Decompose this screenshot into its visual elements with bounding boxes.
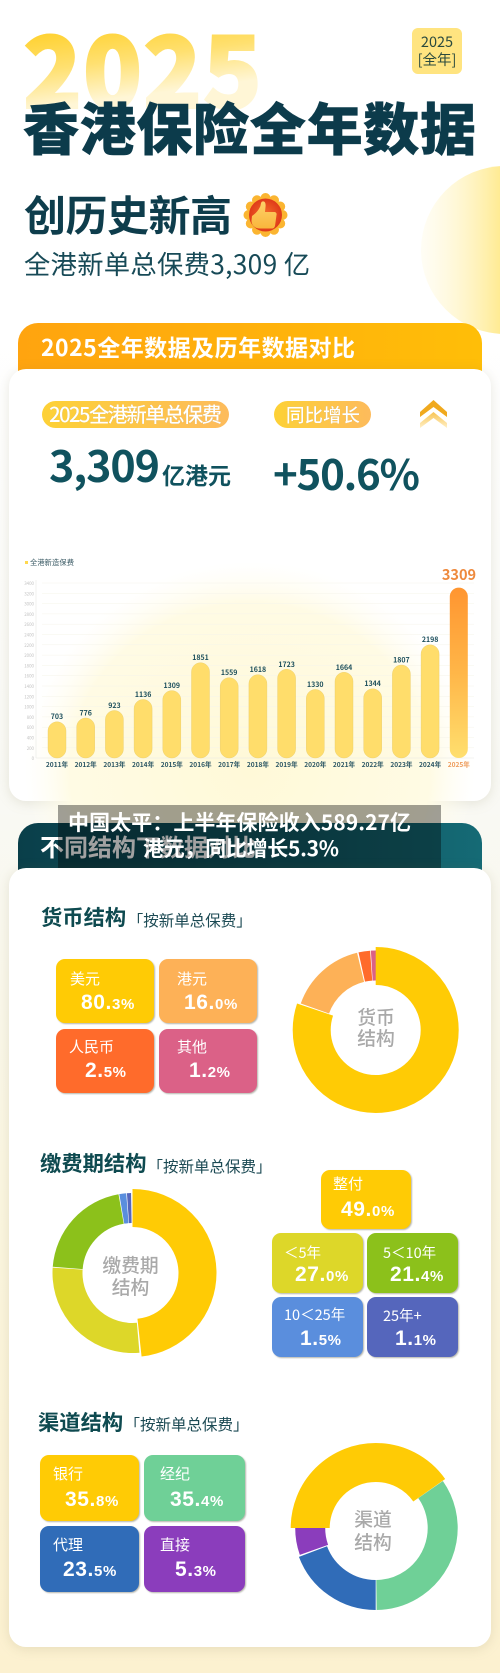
year labels (46, 759, 470, 769)
card: single pay (321, 1170, 411, 1229)
card: 10 to 25 years (272, 1297, 363, 1357)
card: other: 1.2% (189, 1059, 231, 1082)
card: single pay: 49.0% (341, 1198, 395, 1221)
card: under 5 years (272, 1233, 363, 1293)
bar value labels: 3309 (442, 564, 476, 585)
card: direct: 直接 (160, 1534, 190, 1555)
stat: total premium (49, 433, 231, 495)
year labels: 2019年 (276, 759, 298, 769)
heading: currency structure: 「按新单总保费」 (128, 909, 252, 931)
card: USD (56, 959, 154, 1023)
bar value labels: 1344 (364, 679, 381, 689)
y axis: 3400 (24, 581, 35, 587)
chart legend: 全港新造保费 (30, 558, 74, 568)
donut: currency (293, 948, 458, 1112)
panel: structure breakdown (9, 868, 491, 1647)
donut centre label (357, 1003, 395, 1051)
overlay news banner (58, 805, 441, 868)
heading: channel structure: 「按新单总保费」 (124, 1413, 249, 1435)
donut centre label: 货币 (357, 1003, 395, 1030)
card: bank (40, 1455, 139, 1521)
year labels: 2022年 (362, 759, 384, 769)
bar value labels: 776 (80, 708, 92, 718)
card: 5 to 10 years: 21.4% (390, 1263, 444, 1286)
year labels: 2024年 (419, 759, 442, 769)
card: bank: 银行 (53, 1463, 83, 1484)
card: broker (144, 1455, 245, 1521)
card: under 5 years: 27.0% (295, 1263, 349, 1286)
card: RMB: 2.5% (85, 1059, 127, 1082)
y axis: 1000 (24, 705, 35, 711)
y axis: 2600 (24, 622, 35, 628)
year labels: 2016年 (189, 759, 212, 769)
y axis: 2200 (24, 643, 35, 649)
year badge: [全年] (418, 49, 456, 70)
card: agent: 代理 (53, 1534, 83, 1555)
bar value labels: 1309 (164, 681, 180, 691)
donut centre label (102, 1251, 159, 1300)
subtitle: record high: 创历史新高 (24, 183, 232, 244)
bar chart (24, 558, 476, 978)
pill: yoy growth: 同比增长 (286, 402, 360, 428)
stat cards: currency (56, 959, 257, 1093)
y axis: 2400 (24, 632, 35, 638)
bar value labels: 1618 (250, 665, 266, 675)
donut centre label: 结构 (357, 1024, 395, 1051)
card: USD: 美元 (70, 968, 100, 989)
stat: total premium: 3,309 (49, 433, 160, 495)
heading: currency structure: 货币结构 (41, 901, 126, 932)
section header orange: 2025全年数据及历年数据对比 (41, 329, 355, 363)
year labels: 2020年 (304, 759, 327, 769)
y axis: 0 (32, 756, 35, 762)
y axis: 3200 (24, 591, 35, 597)
stat cards: channel (40, 1455, 245, 1592)
y axis: 1600 (24, 674, 35, 680)
card: 10 to 25 years: 10＜25年 (284, 1304, 345, 1325)
donut centre label: 缴费期 (102, 1251, 159, 1278)
donut centre label (354, 1505, 392, 1555)
heading: channel structure (38, 1406, 249, 1437)
card: over 25 years: 1.1% (395, 1327, 437, 1350)
bar value labels: 1136 (135, 690, 151, 700)
y axis: 1800 (24, 663, 35, 669)
y axis: 200 (27, 746, 35, 752)
y axis: 2000 (24, 653, 35, 659)
bar value labels: 1723 (278, 660, 295, 670)
y axis: 3000 (24, 602, 35, 608)
card: broker: 经纪 (160, 1463, 190, 1484)
bar value labels: 1559 (221, 668, 237, 678)
y axis: 2800 (24, 612, 35, 618)
bar value labels: 923 (108, 701, 121, 711)
card: direct: 5.3% (175, 1558, 217, 1581)
white card (9, 369, 491, 801)
card: HKD: 16.0% (184, 991, 238, 1014)
card: HKD (159, 959, 257, 1023)
card: other: 其他 (177, 1036, 207, 1057)
section header teal: 不同结构下数据对比 (40, 828, 256, 863)
overlay news banner: 中国太平：上半年保险收入589.27亿 (68, 807, 411, 837)
year labels: 2025年 (448, 759, 470, 769)
card: 5 to 10 years: 5＜10年 (383, 1242, 436, 1263)
white card (9, 868, 491, 1647)
bar value labels: 1807 (393, 656, 410, 666)
main title: 香港保险全年数据 (23, 86, 476, 167)
decorative sun circle (421, 166, 500, 334)
y axis (24, 580, 474, 762)
card: RMB (56, 1029, 154, 1093)
bar value labels: 2198 (422, 635, 438, 645)
heading: payment term structure: 缴费期结构 (40, 1147, 146, 1178)
year labels: 2014年 (132, 759, 155, 769)
y axis: 600 (27, 725, 35, 731)
overlay news banner: 港元，同比增长5.3% (143, 833, 339, 863)
card: broker: 35.4% (170, 1488, 224, 1511)
heading: channel structure: 渠道结构 (38, 1406, 123, 1437)
card: HKD: 港元 (177, 968, 207, 989)
donut: channel (282, 1435, 469, 1621)
card: 5 to 10 years (367, 1233, 458, 1293)
y axis: 400 (27, 736, 35, 742)
y axis: 1200 (24, 694, 35, 700)
year labels: 2012年 (75, 759, 97, 769)
stat: total premium: 亿港元 (162, 457, 231, 491)
year labels: 2021年 (333, 759, 355, 769)
card: USD: 80.3% (81, 991, 135, 1014)
year badge: 2025 (421, 31, 453, 52)
card: under 5 years: ＜5年 (284, 1242, 321, 1263)
bar value labels (51, 564, 476, 722)
sub headline: 全港新单总保费3,309 亿 (24, 243, 310, 282)
year labels: 2017年 (218, 759, 241, 769)
y axis: 800 (27, 715, 35, 721)
card: RMB: 人民币 (69, 1036, 114, 1057)
card: single pay: 整付 (333, 1173, 363, 1194)
panel: yearly comparison (9, 323, 491, 978)
heading: payment term structure: 「按新单总保费」 (148, 1155, 272, 1177)
year labels: 2013年 (103, 759, 126, 769)
icon: double chevron up (420, 400, 447, 428)
card: agent: 23.5% (63, 1558, 117, 1581)
icon: thumbs up medal (244, 193, 288, 237)
card: over 25 years: 25年+ (383, 1305, 422, 1326)
chart glow (25, 562, 475, 978)
card: agent (40, 1526, 139, 1592)
card: bank: 35.8% (65, 1488, 119, 1511)
donut centre label: 结构 (112, 1273, 149, 1300)
bars (48, 588, 468, 758)
bar value labels: 703 (51, 712, 63, 722)
heading: currency structure (41, 901, 252, 932)
pill: total premium: 2025全港新单总保费 (49, 398, 222, 428)
stat: yoy growth: +50.6% (273, 442, 420, 503)
card: over 25 years (367, 1297, 458, 1357)
section header teal (18, 823, 482, 893)
year labels: 2018年 (247, 759, 269, 769)
year labels: 2015年 (161, 759, 183, 769)
donut: payment term (58, 1198, 207, 1348)
section header orange (18, 323, 482, 393)
card: direct (144, 1526, 245, 1592)
card: 10 to 25 years: 1.5% (300, 1327, 342, 1350)
card: other (159, 1029, 257, 1093)
donut centre label: 渠道 (354, 1505, 392, 1532)
stat cards: payment term (272, 1170, 458, 1357)
donut centre label: 结构 (354, 1528, 392, 1555)
year badge (412, 28, 462, 74)
bar value labels: 1851 (192, 653, 209, 663)
bar value labels: 1330 (307, 680, 324, 690)
year labels: 2011年 (46, 759, 68, 769)
y axis: 1400 (24, 684, 35, 690)
heading: payment term structure (40, 1147, 272, 1178)
year labels: 2023年 (390, 759, 413, 769)
bar value labels: 1664 (336, 663, 352, 673)
